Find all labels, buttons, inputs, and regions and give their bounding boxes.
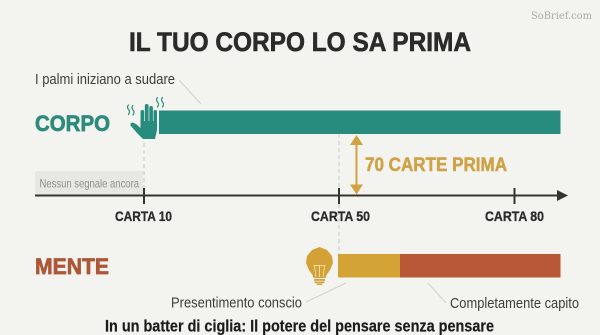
annotation: palms start sweating — [35, 72, 201, 104]
dashed guide: card 50 — [338, 134, 340, 254]
teal body bar — [159, 110, 560, 134]
footer caption: In un batter di ciglia: Il potere del pensare senza pensare — [105, 318, 494, 335]
label: body: CORPO — [35, 111, 110, 136]
watermark: SoBrief.com — [531, 11, 593, 22]
tick label: card 50: CARTA 50 — [311, 209, 370, 224]
tick label: card 10: CARTA 10 — [115, 209, 172, 224]
annotation: conscious hunch: Presentimento conscio — [171, 296, 302, 312]
dashed guide: card 10 — [143, 143, 145, 188]
mind bar: conscious hunch — [338, 254, 400, 278]
timeline axis — [35, 188, 568, 204]
no signal box: Nessun segnale ancora — [40, 176, 139, 190]
annotation: conscious hunch — [171, 283, 346, 312]
mind bar: fully understood — [400, 254, 560, 278]
annotation: fully understood — [428, 283, 579, 312]
icon: light bulb — [306, 247, 333, 285]
no signal box — [35, 171, 143, 195]
title: IL TUO CORPO LO SA PRIMA — [129, 27, 471, 57]
tick label: card 80: CARTA 80 — [485, 209, 544, 224]
callout: 70 cards earlier: 70 CARTE PRIMA — [365, 154, 507, 176]
icon: sweating hand — [128, 98, 164, 139]
annotation: fully understood: Completamente capito — [450, 296, 579, 312]
label: mind: MENTE — [35, 254, 109, 279]
annotation: palms start sweating: I palmi iniziano a sudare — [35, 72, 175, 88]
gold double arrow — [350, 135, 363, 194]
